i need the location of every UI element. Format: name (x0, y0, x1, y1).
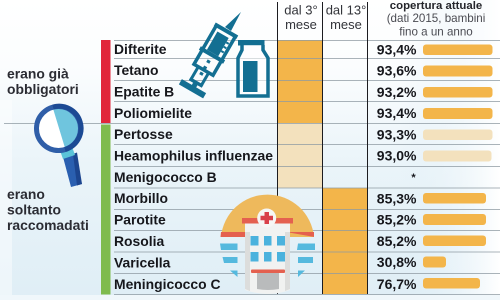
category label: erano soltanto raccomadati: erano (7, 186, 45, 202)
vaccine names: Poliomielite (114, 105, 192, 121)
vaccine names: Pertosse (114, 126, 173, 142)
column dividers (278, 2, 368, 294)
vaccine names (114, 41, 273, 292)
vaccine names: Meningicocco C (114, 276, 221, 292)
vaccine names: Tetano (114, 62, 158, 78)
coverage percentages: 93,6% (377, 62, 417, 78)
column heading: dal 3° mese: mese (285, 17, 317, 32)
column heading: dal 13° mese: dal 13° (326, 2, 366, 18)
sun dome (221, 195, 314, 237)
entrance (251, 270, 285, 273)
column heading: copertura attuale: fino a un anno (399, 26, 473, 38)
column heading: dal 3° mese: dal 3° (284, 2, 318, 18)
coverage percentages: 93,0% (377, 148, 417, 164)
icon: magnifying glass (36, 106, 82, 187)
category label: erano soltanto raccomadati: soltanto (7, 202, 61, 218)
coverage bars (423, 44, 492, 288)
orange cells: dal 13° mese (323, 188, 367, 294)
red category bar (101, 40, 110, 123)
icon: vial (238, 40, 268, 96)
coverage percentages: 30,8% (377, 254, 417, 270)
icon: hospital (220, 195, 315, 294)
coverage percentages: 93,4% (377, 105, 417, 121)
vaccine names: Varicella (114, 254, 171, 270)
category label: erano già obbligatori: erano già (7, 66, 69, 82)
vaccine names: Parotite (114, 212, 166, 228)
column heading: dal 13° mese: mese (330, 17, 362, 32)
coverage percentages: 76,7% (377, 276, 417, 292)
windows (250, 236, 285, 262)
building (245, 222, 290, 294)
icon: syringe (179, 12, 241, 98)
orange cells: dal 3° mese (278, 40, 322, 188)
vaccine names: Difterite (114, 41, 167, 57)
column heading: copertura attuale: copertura attuale (390, 0, 482, 12)
coverage percentages: * (411, 172, 416, 184)
category label: erano già obbligatori: obbligatori (7, 81, 79, 97)
coverage percentages: 85,2% (377, 212, 417, 228)
green category bar (101, 124, 110, 294)
coverage percentages: 85,3% (377, 190, 417, 206)
cross medallion (257, 208, 276, 228)
vaccine names: Menigococco B (114, 169, 217, 185)
top roof (242, 218, 293, 224)
coverage percentages: 93,4% (377, 42, 417, 58)
coverage percentages: 93,2% (377, 84, 417, 100)
side stripes (220, 244, 315, 277)
coverage percentages (377, 42, 417, 292)
vaccine names: Rosolia (114, 233, 164, 249)
side roofs (220, 232, 248, 237)
coverage percentages: 93,3% (377, 126, 417, 142)
coverage percentages: 85,2% (377, 233, 417, 249)
vaccine names: Morbillo (114, 190, 168, 206)
vaccine names: Epatite B (114, 84, 174, 100)
column heading: copertura attuale: (dati 2015, bambini (387, 12, 485, 25)
category label: erano soltanto raccomadati: raccomadati (7, 217, 89, 233)
vaccine names: Heamophilus influenzae (114, 148, 273, 164)
